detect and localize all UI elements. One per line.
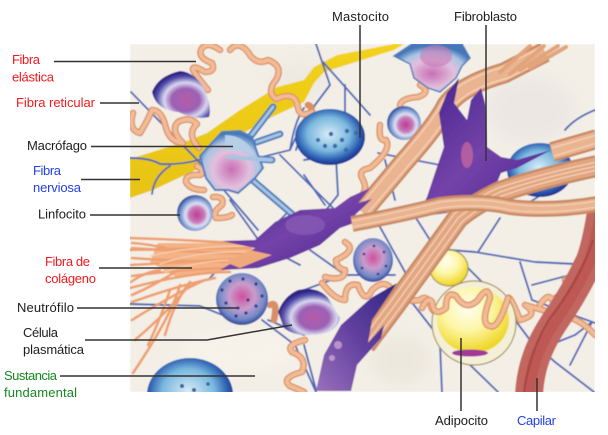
fibroblast upper — [417, 78, 551, 217]
label: Célula plasmática: Célula — [23, 325, 59, 340]
cell: small lymphocyte — [387, 106, 421, 140]
cell: mast cell — [295, 109, 365, 165]
fibroblast lower — [316, 283, 397, 391]
label: Sustancia fundamental: fundamental — [4, 385, 77, 400]
cell: purple monocyte top left — [152, 71, 210, 118]
collagen bundle upper — [358, 46, 566, 215]
collagen bundle horizontal — [352, 200, 597, 227]
left collagen fan — [130, 238, 270, 373]
label: Fibra de colágeno: Fibra de — [45, 254, 90, 269]
reticular nerve fibers — [130, 44, 595, 392]
label: Macrófago: Macrófago — [27, 138, 87, 153]
label: Fibra de colágeno: colágeno — [45, 271, 96, 286]
neutrophil 2 — [353, 238, 393, 282]
fibroblast middle — [220, 188, 372, 270]
plasma cell — [278, 289, 340, 335]
adipocyte large — [432, 281, 516, 365]
fibroblast nucleus — [461, 142, 473, 168]
bottom mast cell — [146, 357, 234, 392]
yellow elastic band — [130, 44, 404, 198]
label: Fibra nerviosa: Fibra — [33, 163, 62, 178]
panel: tissue illustration — [130, 44, 595, 392]
label: Sustancia fundamental: Sustancia — [4, 368, 58, 383]
collagen bundle inside middle fibroblast — [225, 250, 272, 268]
leader lines — [54, 25, 537, 411]
label: Neutrófilo: Neutrófilo — [17, 300, 74, 315]
cell: right blue cell — [507, 143, 573, 197]
collagen bundle lower right — [361, 135, 597, 349]
label: Capilar: Capilar — [517, 413, 557, 428]
label: Mastocito: Mastocito — [332, 9, 389, 24]
neutrophil — [216, 273, 268, 325]
elastic fibers — [132, 45, 595, 392]
label: Adipocito: Adipocito — [435, 413, 488, 428]
label: Célula plasmática: plasmática — [23, 342, 85, 357]
label: Fibra elástica: Fibra — [12, 52, 41, 67]
adipocyte small — [430, 250, 468, 286]
lymphocyte — [177, 195, 213, 231]
label: Fibra nerviosa: nerviosa — [33, 180, 82, 195]
label: Fibra reticular: Fibra reticular — [16, 95, 96, 110]
label: Fibroblasto: Fibroblasto — [454, 9, 517, 24]
label: Linfocito: Linfocito — [38, 206, 86, 222]
cell: granulated macrophage top — [394, 44, 470, 92]
elastic fiber across adipocyte — [422, 291, 508, 326]
label: Fibra elástica: elástica — [12, 70, 55, 84]
capillary — [524, 205, 602, 395]
macrophage — [200, 107, 292, 214]
